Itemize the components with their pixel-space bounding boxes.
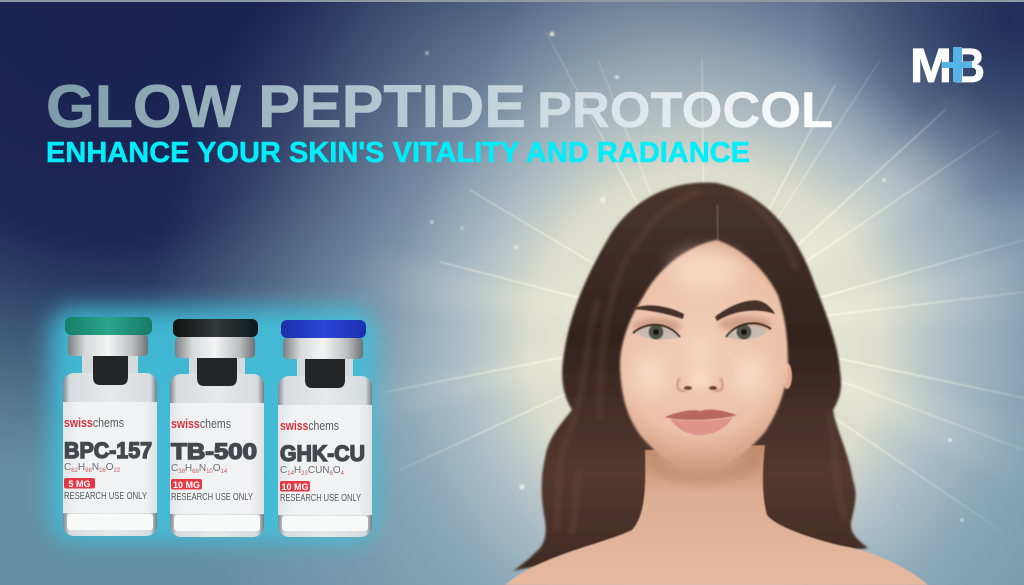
formula: CUN xyxy=(308,465,330,476)
formula: 98 xyxy=(85,468,92,474)
right eyebrow xyxy=(715,300,775,321)
formula: 4 xyxy=(341,471,345,477)
formula: H xyxy=(294,465,301,476)
chin shadow xyxy=(650,450,760,485)
formula: C xyxy=(64,462,71,473)
formula: 62 xyxy=(71,468,79,474)
formula: O xyxy=(106,462,114,473)
research note: RESEARCH USE ONLY xyxy=(64,490,147,502)
logo: M xyxy=(910,40,952,93)
logo xyxy=(910,40,985,93)
peptide name: GHK-CU xyxy=(280,441,365,466)
thin ray lines xyxy=(385,30,1024,530)
dose badge: 5 MG xyxy=(68,479,91,489)
cheek and forehead highlights xyxy=(632,250,768,397)
formula: C xyxy=(171,463,178,474)
right eye xyxy=(726,323,771,340)
hair back xyxy=(513,183,868,571)
brand: swisschems xyxy=(280,419,339,433)
research note: RESEARCH USE ONLY xyxy=(171,491,253,503)
formula: 16 xyxy=(99,468,106,474)
hair highlights xyxy=(556,192,845,535)
dose badge xyxy=(64,478,95,489)
formula: 6 xyxy=(330,471,334,477)
dose badge: 10 MG xyxy=(173,480,200,490)
subtitle: ENHANCE YOUR SKIN'S VITALITY AND RADIANCE xyxy=(46,137,750,169)
left eyebrow xyxy=(632,305,684,319)
research note: RESEARCH USE ONLY xyxy=(280,492,361,504)
ear xyxy=(782,363,792,389)
formula: 10 xyxy=(206,469,213,475)
vial: GHK-CU xyxy=(278,320,372,537)
formula: 23 xyxy=(301,471,308,477)
sparkles xyxy=(426,32,963,521)
light rays behind the portrait xyxy=(360,90,1024,490)
title: protocol: PROTOCOL xyxy=(537,82,833,138)
title xyxy=(46,73,833,140)
lips xyxy=(665,410,737,435)
formula: C xyxy=(280,465,287,476)
nose xyxy=(677,372,723,391)
formula: N xyxy=(92,462,99,473)
peptide name: BPC-157 xyxy=(64,438,152,463)
title: glow peptide: GLOW PEPTIDE xyxy=(46,73,526,140)
logo plus xyxy=(942,47,972,82)
dose badge: 10 MG xyxy=(281,482,309,492)
shoulders and neck xyxy=(505,445,928,585)
formula: H xyxy=(78,462,85,473)
formula: 14 xyxy=(287,471,295,477)
formula: O xyxy=(213,463,221,474)
formula: 14 xyxy=(221,469,228,475)
formula: O xyxy=(333,465,341,476)
formula: N xyxy=(199,463,206,474)
face xyxy=(620,240,788,472)
brand: swisschems xyxy=(171,417,231,431)
formula: H xyxy=(185,463,192,474)
formula: 68 xyxy=(192,469,199,475)
vial glow xyxy=(50,308,376,542)
peptide name: TB-500 xyxy=(171,439,257,464)
vial: TB-500 xyxy=(170,319,264,537)
eye shadow xyxy=(633,316,771,334)
logo: B xyxy=(953,40,985,93)
formula: 22 xyxy=(114,468,121,474)
vial: BPC-157 xyxy=(63,317,157,536)
hair parting xyxy=(717,205,718,240)
left eye xyxy=(633,324,680,340)
formula: 38 xyxy=(178,469,186,475)
portrait xyxy=(505,183,928,585)
brand: swisschems xyxy=(64,416,124,430)
